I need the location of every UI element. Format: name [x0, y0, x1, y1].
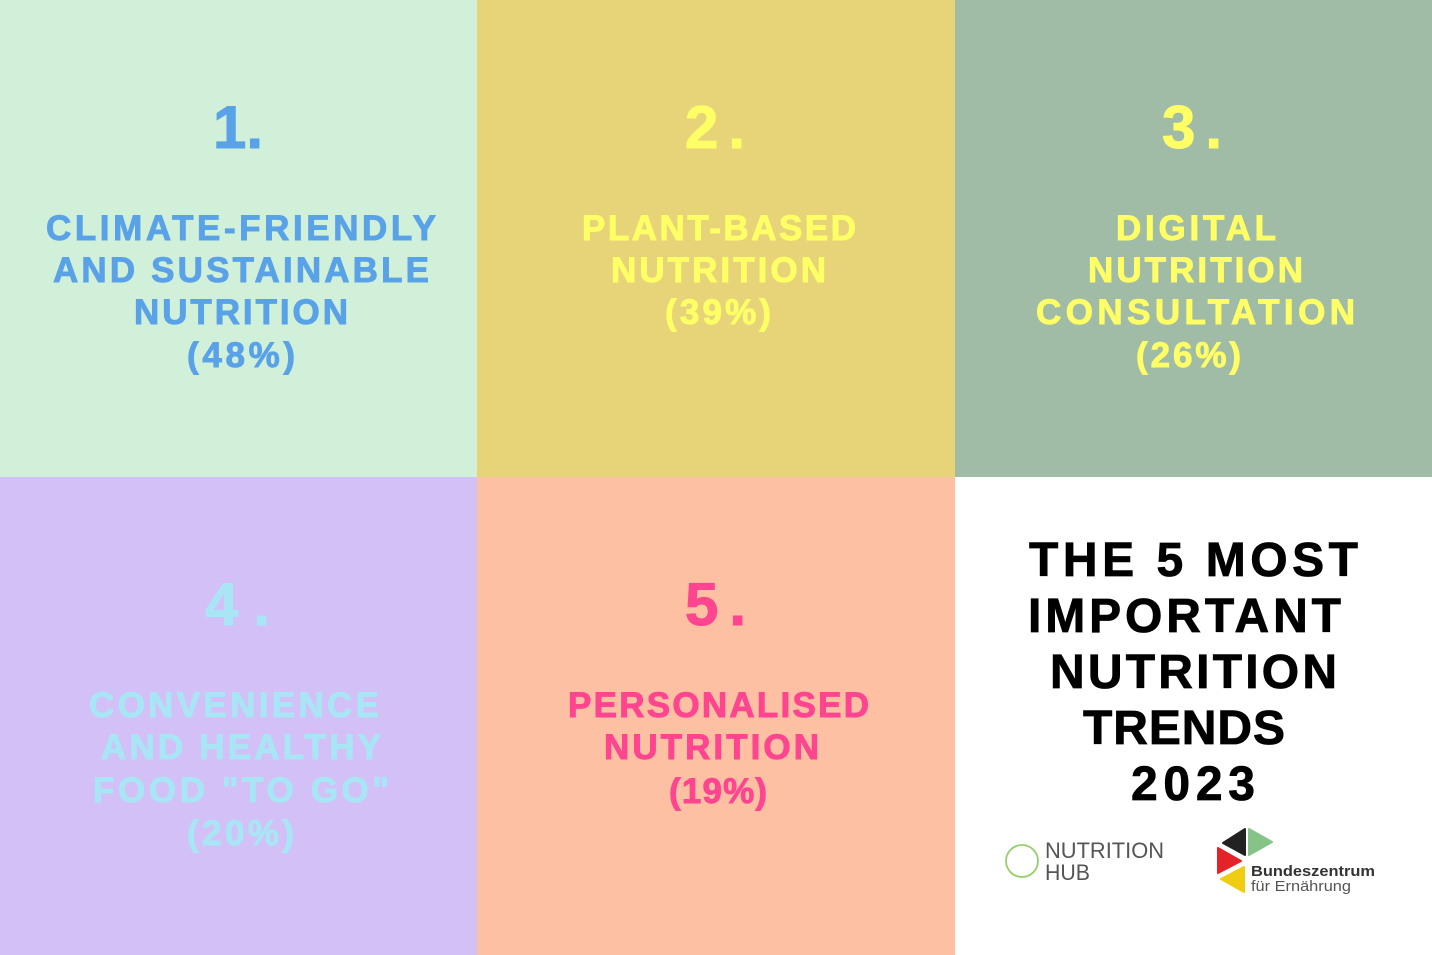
panel: trend 3 digital consultation [955, 0, 1432, 477]
logo: Bundeszentrum für Ernährung: für Ernährung [1251, 878, 1351, 895]
panel: trend 3 digital consultation: DIGITAL [1116, 209, 1276, 248]
panel: trend 2 plant-based: NUTRITION [611, 251, 826, 290]
panel: trend 1 climate-friendly: AND SUSTAINABLE [53, 251, 429, 290]
logo: Nutrition Hub: HUB [1045, 860, 1090, 885]
panel: trend 1 climate-friendly: 1. [213, 94, 263, 161]
panel: trend 3 digital consultation: 3. [1162, 94, 1222, 161]
title: 2023 [1131, 758, 1255, 811]
panel: trend 4 convenience: 4. [205, 571, 270, 638]
title: NUTRITION [1050, 646, 1337, 699]
panel: trend 4 convenience: AND HEALTHY [101, 728, 381, 767]
panel: trend 4 convenience: FOOD "TO GO" [93, 771, 389, 810]
logo: Bundeszentrum für Ernährung: Bundeszentrum [1251, 863, 1375, 880]
panel: trend 5 personalised: NUTRITION [604, 728, 819, 767]
panel: trend 3 digital consultation: CONSULTATION [1036, 293, 1355, 332]
panel: trend 2 plant-based: (39%) [665, 293, 771, 332]
panel: trend 1 climate-friendly: (48%) [187, 336, 295, 375]
logo: Nutrition Hub [1006, 838, 1164, 885]
panel: trend 3 digital consultation: (26%) [1136, 336, 1241, 375]
panel: trend 2 plant-based: 2. [685, 94, 745, 161]
panel: trend 1 climate-friendly: CLIMATE-FRIENDLY [46, 209, 436, 248]
panel: trend 2 plant-based: PLANT-BASED [582, 209, 856, 248]
panel: title and logos [955, 477, 1432, 955]
panel: trend 1 climate-friendly [0, 0, 477, 477]
panel: trend 5 personalised: (19%) [669, 772, 767, 811]
panel: trend 4 convenience: CONVENIENCE [89, 686, 379, 725]
logo: Nutrition Hub: NUTRITION [1045, 838, 1164, 863]
panel: trend 4 convenience: (20%) [187, 814, 294, 853]
title: THE 5 MOST [1029, 534, 1358, 587]
logo: Bundeszentrum für Ernährung [1218, 829, 1375, 895]
panel: trend 5 personalised [477, 477, 955, 955]
title: TRENDS [1083, 702, 1285, 755]
title: IMPORTANT [1028, 590, 1341, 643]
panel: trend 2 plant-based [477, 0, 955, 477]
panel: trend 5 personalised: 5. [685, 571, 746, 638]
panel: trend 3 digital consultation: NUTRITION [1088, 251, 1303, 290]
panel: trend 4 convenience [0, 477, 477, 955]
panel: trend 1 climate-friendly: NUTRITION [134, 293, 348, 332]
title [1028, 534, 1358, 811]
panel: trend 5 personalised: PERSONALISED [568, 686, 869, 725]
